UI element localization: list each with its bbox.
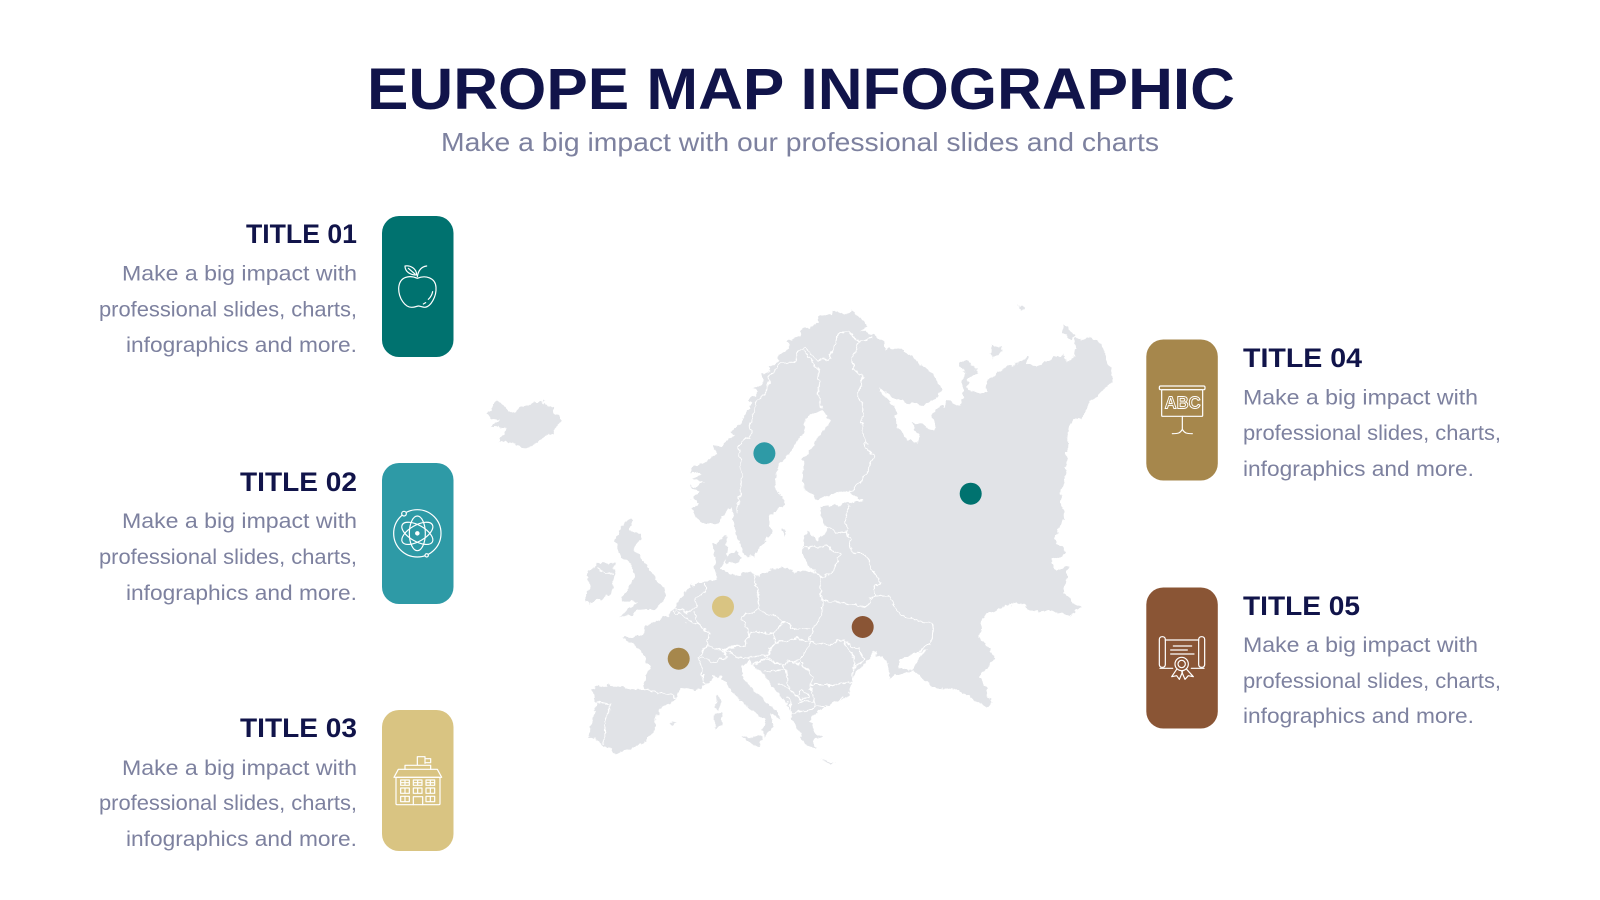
body text 01: Make a big impact with (122, 262, 357, 286)
body text 01: infographics and more. (126, 333, 357, 357)
panel: title 02 (99, 463, 454, 605)
title: EUROPE MAP INFOGRAPHIC (367, 57, 1235, 122)
body text 05: professional slides, charts, (1243, 669, 1501, 693)
card 02 (382, 463, 454, 604)
body text 04: infographics and more. (1243, 457, 1474, 481)
heading 04: TITLE 04 (1243, 343, 1362, 373)
body text 03 (99, 756, 357, 851)
body text 05: Make a big impact with (1243, 633, 1478, 657)
landmass: islands and Britain (486, 305, 1076, 763)
heading 03: TITLE 03 (240, 713, 357, 743)
sea of Azov (898, 650, 929, 670)
heading 01: TITLE 01 (246, 219, 357, 249)
body text 04: Make a big impact with (1243, 386, 1478, 410)
icon: apple (399, 266, 436, 307)
body text 01 (99, 262, 357, 357)
body text 02: professional slides, charts, (99, 545, 357, 569)
body text 03: Make a big impact with (122, 756, 357, 780)
icon: ABC presentation board (1159, 386, 1205, 434)
map marker: Ukraine (852, 616, 874, 638)
map marker: France (668, 648, 690, 670)
body text 02: Make a big impact with (122, 509, 357, 533)
body text 04 (1243, 386, 1501, 481)
panel: title 05 (1146, 588, 1501, 728)
country borders (596, 332, 933, 743)
map of Europe (486, 305, 1113, 763)
body text 03: infographics and more. (126, 827, 357, 851)
body text 02: infographics and more. (126, 581, 357, 605)
card 04 (1146, 340, 1218, 480)
map marker: Sweden (753, 442, 775, 464)
body text 04: professional slides, charts, (1243, 421, 1501, 445)
card 01 (382, 216, 454, 357)
body text 03: professional slides, charts, (99, 791, 357, 815)
icon: school building (394, 757, 442, 805)
heading 02: TITLE 02 (240, 467, 357, 497)
icon: ABC presentation board: ABC (1165, 393, 1201, 413)
body text 05 (1243, 633, 1501, 728)
body text 05: infographics and more. (1243, 704, 1474, 728)
panel: title 04 (1146, 340, 1501, 481)
card 03 (382, 710, 454, 851)
map marker: Germany (712, 596, 734, 618)
body text 01: professional slides, charts, (99, 298, 357, 322)
panel: title 03 (99, 710, 454, 851)
map marker: Russia (960, 483, 982, 505)
landmass: continental Europe (589, 311, 1113, 753)
icon: atom (394, 510, 441, 557)
subtitle: Make a big impact with our professional slides and charts (441, 127, 1159, 157)
body text 02 (99, 509, 357, 605)
panel: title 01 (99, 216, 454, 357)
card 05 (1146, 588, 1218, 728)
heading 05: TITLE 05 (1243, 591, 1360, 621)
icon: diploma scroll (1159, 637, 1205, 679)
